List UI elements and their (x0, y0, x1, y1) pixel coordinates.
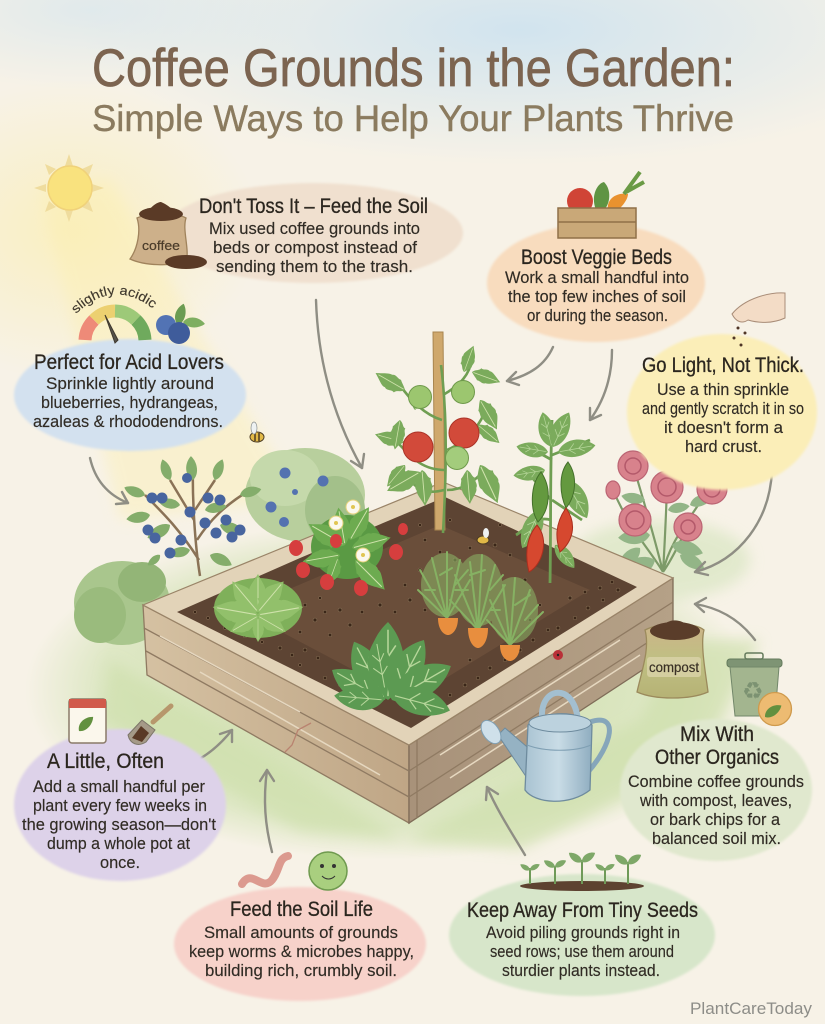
icon: seedlings (519, 850, 644, 891)
raised garden bed (143, 482, 673, 823)
arrow: go light to roses (695, 470, 772, 575)
icon: sun (34, 154, 104, 222)
body text: with compost, leaves, (639, 791, 792, 810)
arrow: boost veggie beds to pepper (590, 350, 612, 420)
body text (642, 380, 804, 456)
body text (189, 923, 414, 980)
plant: spinach (325, 622, 458, 722)
body text: Use a thin sprinkle (657, 380, 789, 399)
heading: Mix With (680, 723, 754, 746)
bed: top rim (143, 482, 673, 745)
icon: scoop (128, 706, 171, 744)
heading: A Little, Often (47, 750, 164, 773)
plant: rose bush (606, 451, 727, 583)
icon: recycling bin: ♻ (742, 678, 764, 705)
body text: sending them to the trash. (216, 257, 413, 276)
heading: Boost Veggie Beds (521, 246, 672, 269)
body text: balanced soil mix. (652, 829, 781, 848)
body text: dump a whole pot at (47, 834, 190, 853)
title (92, 39, 735, 139)
body text: Work a small handful into (505, 268, 689, 287)
heading: Don't Toss It – Feed the Soil (199, 195, 428, 218)
body text: the top few inches of soil (508, 287, 686, 306)
body text: Small amounts of grounds (204, 923, 398, 942)
body text (486, 923, 680, 980)
arrow: mix with organics to bed (695, 598, 755, 640)
arrow: feed the soil to bed (316, 300, 364, 468)
body text (33, 374, 223, 431)
arrow: acid lovers to blueberry (90, 458, 128, 504)
heading: Perfect for Acid Lovers (34, 351, 224, 374)
icon: ladybug (553, 650, 563, 660)
body text: hard crust. (685, 437, 762, 456)
arrow: little often to bed (187, 730, 232, 765)
watermark: PlantCareToday (690, 999, 812, 1018)
bed: plank lines (144, 602, 673, 818)
body text: Combine coffee grounds (628, 772, 804, 791)
icon: coffee bag: coffee (142, 238, 180, 253)
icon: calendar (69, 699, 106, 743)
panel: don't toss it (163, 183, 463, 283)
body text: sturdier plants instead. (502, 961, 660, 980)
plant: carrots (418, 552, 543, 661)
bed: right front wall (409, 578, 673, 823)
arrow: soil life to bed (260, 770, 274, 852)
body text (22, 777, 216, 872)
plant: pepper (512, 409, 597, 583)
heading: Go Light, Not Thick. (642, 354, 804, 377)
body text: azaleas & rhododendrons. (33, 412, 223, 431)
icon: worm (242, 856, 288, 884)
icon: bee (250, 422, 264, 442)
plant: strawberries (289, 500, 408, 596)
body text: keep worms & microbes happy, (189, 942, 414, 961)
bed: left front wall (143, 605, 409, 823)
heading (655, 723, 779, 769)
body text: or bark chips for a (650, 810, 781, 829)
heading: Feed the Soil Life (230, 898, 373, 921)
bed: soil (177, 497, 637, 728)
panel: a little often (14, 729, 226, 881)
panel: go light (627, 334, 817, 490)
plant: lettuce (211, 574, 305, 642)
icon: recycling bin (727, 653, 792, 726)
panel: keep away from tiny seeds (449, 874, 715, 996)
panel: perfect for acid lovers (14, 339, 246, 451)
arrow: tiny seeds to can (486, 787, 525, 855)
heading: Other Organics (655, 746, 779, 769)
body text (628, 772, 804, 848)
title: Coffee Grounds in the Garden: (92, 39, 735, 98)
icon: watering can (477, 693, 609, 801)
body text: it doesn't form a (664, 418, 784, 437)
icon: acidity gauge: slightly acidic (72, 286, 156, 313)
icon: blueberries (156, 302, 205, 344)
icon: small bee in bed (477, 528, 489, 544)
icon: coffee bag (130, 202, 207, 269)
panel: feed the soil life (174, 887, 426, 1001)
plant: tomato (371, 332, 507, 533)
body text: or during the season. (527, 306, 668, 325)
heading: Keep Away From Tiny Seeds (467, 899, 698, 922)
body text: building rich, crumbly soil. (205, 961, 397, 980)
arrow: boost veggie beds to tomato (507, 347, 553, 385)
icon: compost sack: compost (649, 659, 699, 675)
panel: boost veggie beds (487, 224, 705, 342)
bed: soil texture (193, 518, 620, 707)
body text: Mix used coffee grounds into (209, 219, 420, 238)
stake (433, 332, 445, 530)
body text: the growing season—don't (22, 815, 216, 834)
body text: once. (100, 853, 140, 872)
icon: hand sprinkling (732, 293, 785, 346)
icon: microbe (309, 852, 347, 890)
panel: mix with other organics (620, 719, 812, 861)
title: Simple Ways to Help Your Plants Thrive (92, 98, 734, 139)
body text: Avoid piling grounds right in (486, 923, 680, 942)
body text: plant every few weeks in (33, 796, 207, 815)
body text (505, 268, 689, 325)
body text: Add a small handful per (33, 777, 205, 796)
body text: blueberries, hydrangeas, (41, 393, 218, 412)
body text: seed rows; use them around (490, 942, 674, 961)
body text (209, 219, 420, 276)
body text: Sprinkle lightly around (46, 374, 214, 393)
bush with berries (245, 448, 365, 544)
icon: compost sack (637, 620, 708, 698)
icon: acidity gauge (72, 286, 156, 344)
background bush left (74, 561, 170, 645)
icon: vegetable crate (558, 172, 644, 238)
plant: blueberry shrub (122, 456, 262, 576)
grass under garden bed (25, 520, 760, 860)
body text: beds or compost instead of (213, 238, 417, 257)
